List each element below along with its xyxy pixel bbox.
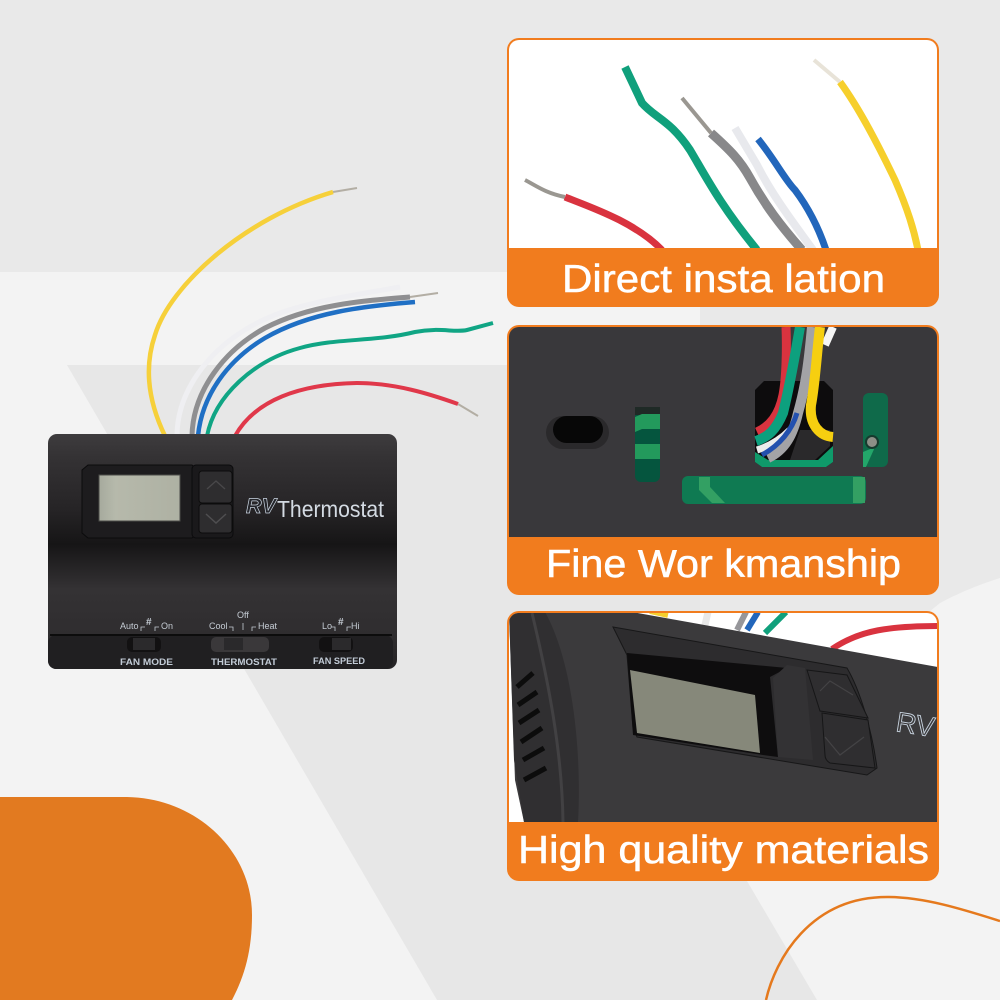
wire close-ups	[525, 60, 918, 250]
panel: high quality materials	[507, 611, 940, 881]
partial brand logo: RV	[894, 706, 937, 743]
long green slot	[682, 476, 866, 504]
side edge	[509, 612, 579, 822]
product: thermostat wires	[149, 188, 493, 436]
keypad	[807, 670, 875, 768]
control labels: Heat	[258, 621, 278, 631]
display bezel	[82, 465, 194, 538]
control labels: #	[146, 617, 152, 628]
switch captions: FAN SPEED	[313, 656, 365, 667]
oval hole	[546, 416, 609, 449]
brand logo: RV	[246, 495, 278, 518]
brand logo: Thermostat	[277, 496, 385, 522]
angled body	[509, 612, 938, 822]
control labels: On	[161, 621, 173, 631]
panel: direct installation	[507, 38, 939, 307]
control labels: Auto	[120, 621, 139, 631]
control labels: #	[338, 617, 344, 628]
small green slot	[635, 407, 660, 482]
wire opening	[755, 327, 833, 467]
caption: High quality materials	[518, 829, 929, 872]
slider: thermostat	[211, 637, 269, 652]
button panel	[192, 465, 233, 538]
orange outline arc	[766, 897, 1000, 1000]
panel: fine workmanship	[507, 325, 939, 595]
switch captions: THERMOSTAT	[211, 657, 277, 668]
wires	[650, 611, 940, 649]
decorative orange blob	[0, 797, 252, 1000]
up button	[199, 471, 232, 503]
switch captions: FAN MODE	[120, 657, 173, 668]
right green slot	[863, 393, 888, 467]
control labels: Off	[237, 610, 249, 620]
caption: Direct insta lation	[562, 258, 885, 301]
slider: fan mode	[127, 637, 161, 652]
control labels	[120, 610, 360, 631]
control labels: Lo	[322, 621, 332, 631]
switch captions	[120, 656, 365, 668]
LCD screen	[99, 475, 180, 521]
control labels: Cool	[209, 621, 228, 631]
control labels: Hi	[351, 621, 360, 631]
bezel and display	[613, 627, 877, 775]
slider: fan speed	[319, 637, 353, 652]
caption: Fine Wor kmanship	[546, 543, 901, 586]
product: thermostat body	[48, 434, 397, 669]
LCD screen	[630, 670, 760, 753]
down button	[199, 504, 232, 533]
